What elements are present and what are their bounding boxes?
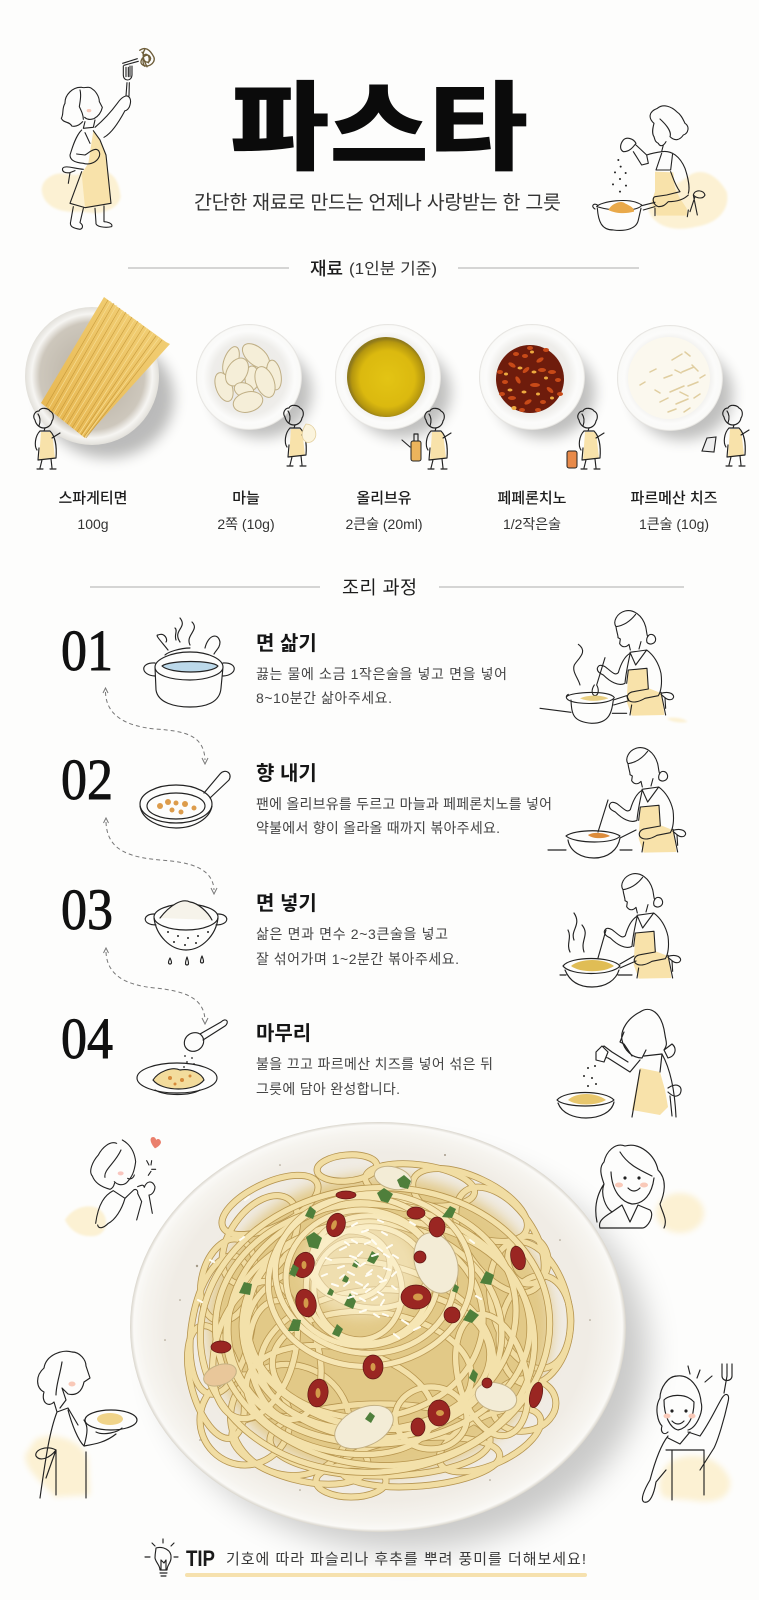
illustration: woman cheering with fork bbox=[642, 1364, 732, 1502]
plate bbox=[130, 1122, 626, 1532]
illustration: woman raising fork bbox=[42, 49, 154, 229]
garlic slices bbox=[201, 1162, 520, 1457]
step description bbox=[256, 666, 507, 706]
ingredient: parmesan bbox=[617, 325, 749, 466]
arrow: step 3 to 4 bbox=[104, 948, 208, 1024]
illustration: cook with pan bbox=[548, 748, 686, 858]
step description: 잘 섞어가며 1~2분간 볶아주세요. bbox=[256, 951, 459, 967]
step number 01: 01 bbox=[61, 618, 113, 683]
ingredient labels: 1큰술 (10g) bbox=[639, 516, 709, 532]
step description: 팬에 올리브유를 두르고 마늘과 페페론치노를 넣어 bbox=[256, 796, 552, 812]
step description bbox=[256, 926, 459, 967]
illustration: cook sprinkling cheese bbox=[557, 1009, 681, 1118]
ingredient labels: 페페론치노 bbox=[497, 490, 567, 507]
step title: 향 내기 bbox=[256, 762, 317, 785]
section heading: cooking steps: 조리 과정 bbox=[342, 577, 417, 598]
illustration: woman seasoning a pot bbox=[593, 106, 727, 230]
step number 04: 04 bbox=[61, 1006, 113, 1071]
icon: frying pan bbox=[140, 771, 230, 828]
arrow: step 1 to 2 bbox=[103, 688, 208, 764]
arrow: step 2 to 3 bbox=[104, 818, 217, 894]
ingredient labels: 100g bbox=[77, 516, 109, 532]
step title: 면 삶기 bbox=[256, 632, 317, 655]
section heading: ingredients bbox=[128, 259, 639, 279]
parsley bbox=[239, 1175, 494, 1423]
step number 02: 02 bbox=[61, 747, 113, 812]
step 4 bbox=[61, 1006, 681, 1118]
step number 03: 03 bbox=[61, 877, 113, 942]
icon: boiling pot bbox=[144, 618, 234, 707]
illustration: cook tossing pasta bbox=[560, 874, 681, 987]
step 3 bbox=[61, 874, 681, 987]
icon: mini cook pushing spaghetti bbox=[34, 408, 60, 469]
ingredient labels: 올리브유 bbox=[356, 490, 412, 507]
step description: 약불에서 향이 올라올 때까지 볶아주세요. bbox=[256, 820, 500, 836]
subtitle: 간단한 재료로 만드는 언제나 사랑받는 한 그릇 bbox=[194, 192, 561, 214]
plate of pasta bbox=[130, 1122, 648, 1550]
step description: 삶은 면과 면수 2~3큰술을 넣고 bbox=[256, 926, 448, 942]
title: 파스타 bbox=[230, 74, 528, 183]
illustration: woman resting chin bbox=[596, 1145, 704, 1233]
step title: 면 넣기 bbox=[256, 892, 317, 915]
tip label: TIP bbox=[186, 1546, 215, 1571]
section heading: ingredients: 재료 bbox=[310, 259, 343, 279]
grated parmesan bbox=[198, 1197, 481, 1338]
pasta bbox=[177, 1152, 584, 1497]
step description bbox=[256, 796, 552, 836]
icon: light bulb bbox=[145, 1539, 178, 1576]
ingredient labels: 2쪽 (10g) bbox=[217, 516, 275, 532]
icon: mini cook with chili jar bbox=[567, 408, 604, 469]
ingredient: garlic bbox=[196, 324, 316, 466]
ingredient labels bbox=[58, 490, 718, 532]
step description bbox=[256, 1056, 493, 1097]
ingredient: spaghetti bbox=[25, 297, 174, 469]
step description: 끓는 물에 소금 1작은술을 넣고 면을 넣어 bbox=[256, 666, 507, 682]
section heading: ingredients: (1인분 기준) bbox=[349, 260, 437, 278]
icon: colander bbox=[145, 901, 227, 965]
ingredient: peperoncino bbox=[479, 324, 604, 469]
ingredient labels: 파르메산 치즈 bbox=[631, 490, 718, 507]
step description: 불을 끄고 파르메산 치즈를 넣어 섞은 뒤 bbox=[256, 1056, 493, 1072]
illustration: woman with heart bbox=[65, 1137, 161, 1236]
chili slices bbox=[211, 1191, 545, 1436]
illustration: woman serving a plate bbox=[25, 1351, 137, 1498]
ingredient labels: 2큰술 (20ml) bbox=[345, 516, 423, 532]
tip text: 기호에 따라 파슬리나 후추를 뿌려 풍미를 더해보세요! bbox=[226, 1551, 586, 1568]
ingredient labels: 마늘 bbox=[232, 490, 260, 507]
step 2 bbox=[61, 747, 686, 858]
step title: 마무리 bbox=[256, 1022, 311, 1045]
step 1 bbox=[61, 611, 688, 723]
ingredient: olive oil bbox=[335, 324, 451, 469]
tip underline bbox=[185, 1573, 587, 1577]
step description: 그릇에 담아 완성합니다. bbox=[256, 1081, 400, 1097]
ingredient labels: 스파게티면 bbox=[58, 490, 128, 507]
plate speckles bbox=[164, 1154, 591, 1491]
ingredient labels: 1/2작은술 bbox=[503, 516, 561, 532]
icon: mini cook with oil bottle bbox=[402, 408, 451, 469]
tip bbox=[145, 1539, 587, 1577]
icon: mini cook with grater bbox=[702, 405, 749, 466]
plate shadow bbox=[160, 1154, 648, 1550]
icon: mini cook with garlic bbox=[284, 405, 316, 466]
icon: spoon and plate bbox=[137, 1020, 227, 1094]
illustration: cook boiling noodles bbox=[540, 611, 688, 723]
step description: 8~10분간 삶아주세요. bbox=[256, 690, 392, 706]
